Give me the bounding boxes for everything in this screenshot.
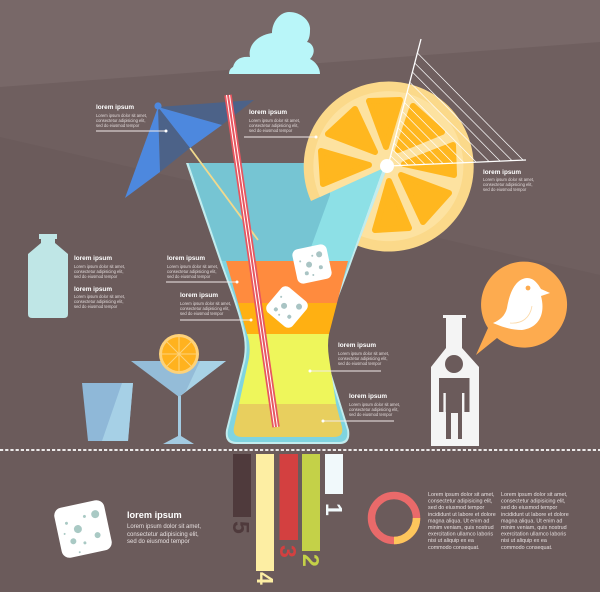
text block: paragraph right: Lorem ipsum dolor sit amet, — [501, 492, 568, 498]
bar 4: 4 — [252, 572, 278, 585]
label: bottle note two: Lorem ipsum dolor sit amet, — [74, 294, 125, 299]
bar 5: 5 — [228, 521, 254, 534]
label: amber layer note: lorem ipsum — [180, 292, 218, 299]
icon: orange slice — [304, 82, 474, 252]
label: orange layer note: lorem ipsum — [167, 255, 205, 262]
text block: paragraph right: exercitation ullamco laboris — [501, 532, 566, 538]
label: orange note: Lorem ipsum dolor sit amet, — [483, 177, 534, 182]
label: orange note — [483, 169, 534, 192]
label: amber layer note: Lorem ipsum dolor sit amet, — [180, 301, 231, 306]
label: orange layer note: sed do eiusmod tempor — [167, 274, 211, 279]
icon: bottle left — [28, 234, 68, 318]
donut chart — [372, 496, 416, 540]
icon: bottle with person — [431, 315, 479, 446]
label: bottle note one: sed do eiusmod tempor — [74, 274, 118, 279]
text block: paragraph left: Lorem ipsum dolor sit amet, — [428, 492, 495, 498]
text block: ice cube note: Lorem ipsum dolor sit amet, — [127, 524, 201, 530]
text block: paragraph right: minim veniam, quis nostrud — [501, 525, 567, 531]
icon: ice cube lower — [264, 284, 310, 330]
label: straw note: lorem ipsum — [249, 109, 287, 116]
text block: paragraph left: incididunt ut labore et dolore — [428, 512, 496, 518]
label: bottle note one: Lorem ipsum dolor sit amet, — [74, 264, 125, 269]
label: tan layer note: consectetur adipisicing elit, — [349, 407, 398, 412]
label: amber layer note: sed do eiusmod tempor — [180, 311, 224, 316]
label: tan layer note: Lorem ipsum dolor sit amet, — [349, 402, 400, 407]
icon: drinking straw — [226, 95, 278, 427]
text block: paragraph left: sed do eiusmod tempor — [428, 505, 485, 511]
text block: paragraph right: nisi ut aliquip ex ea — [501, 538, 547, 544]
drink layer: amber — [238, 303, 337, 334]
label: bottle note two — [74, 286, 125, 309]
text block: paragraph right: incididunt ut labore et dolore — [501, 512, 569, 518]
label: orange note: sed do eiusmod tempor — [483, 187, 527, 192]
text block: paragraph left: nisi ut aliquip ex ea — [428, 538, 474, 544]
icon: cloud — [229, 12, 320, 74]
label: bottle note one — [74, 255, 125, 279]
text block: ice cube note — [127, 510, 201, 545]
text block: paragraph left: consectetur adipisicing elit, — [428, 499, 493, 505]
label: umbrella note: Lorem ipsum dolor sit amet, — [96, 113, 147, 118]
label: tan layer note: lorem ipsum — [349, 393, 387, 400]
icon: tumbler glass — [82, 383, 133, 441]
label: bottle note two: lorem ipsum — [74, 286, 112, 293]
text block: paragraph left: minim veniam, quis nostrud — [428, 525, 494, 531]
label: tan layer note: sed do eiusmod tempor — [349, 412, 393, 417]
drink layer: tan — [234, 404, 342, 437]
label: yellow layer note: consectetur adipisicing elit, — [338, 356, 387, 361]
dashed divider — [0, 449, 600, 451]
text block: ice cube note: sed do eiusmod tempor — [127, 539, 190, 545]
icon: martini glass with orange — [131, 334, 226, 444]
drink layer: yellow — [239, 334, 336, 404]
icon: speech bubble with bird — [476, 262, 567, 355]
text block: paragraph right: magna aliqua. Ut enim ad — [501, 518, 562, 524]
label: orange layer note — [166, 255, 238, 284]
label: umbrella note: sed do eiusmod tempor — [96, 123, 140, 128]
label: yellow layer note — [308, 342, 389, 372]
text block: paragraph left: commodo consequat. — [428, 545, 480, 551]
label: orange note: lorem ipsum — [483, 169, 521, 176]
icon: cocktail umbrella — [125, 100, 258, 240]
label: straw note — [244, 109, 318, 138]
bar 2: 2 — [298, 554, 324, 567]
bar 3: 3 — [275, 545, 301, 558]
glass with layered drink — [186, 163, 388, 444]
label: orange layer note: consectetur adipisicing elit, — [167, 269, 216, 274]
text block: paragraph right: commodo consequat. — [501, 545, 553, 551]
drink layer: orange — [226, 261, 348, 303]
text block: paragraph right: consectetur adipisicing elit, — [501, 499, 566, 505]
text block: paragraph left — [428, 492, 496, 551]
bar 1: 1 — [321, 503, 347, 516]
label: straw note: sed do eiusmod tempor — [249, 128, 293, 133]
label: umbrella note — [96, 104, 168, 132]
label: umbrella note: lorem ipsum — [96, 104, 134, 111]
icon: ice cube upper — [291, 243, 333, 285]
label: bottle note two: consectetur adipisicing elit, — [74, 299, 123, 304]
label: amber layer note: consectetur adipisicing elit, — [180, 306, 229, 311]
text block: ice cube note: lorem ipsum — [127, 510, 182, 520]
icon: large ice cube — [53, 499, 113, 559]
text block: ice cube note: consectetur adipisicing elit, — [127, 532, 199, 538]
label: bottle note one: consectetur adipisicing elit, — [74, 269, 123, 274]
label: tan layer note — [322, 393, 400, 422]
label: straw note: Lorem ipsum dolor sit amet, — [249, 118, 300, 123]
label: bottle note one: lorem ipsum — [74, 255, 112, 262]
label: bottle note two: sed do eiusmod tempor — [74, 304, 118, 309]
hatched triangle diagram — [380, 39, 526, 173]
label: yellow layer note: Lorem ipsum dolor sit amet, — [338, 351, 389, 356]
label: straw note: consectetur adipisicing elit, — [249, 123, 298, 128]
text block: paragraph left: magna aliqua. Ut enim ad — [428, 518, 489, 524]
label: umbrella note: consectetur adipisicing elit, — [96, 118, 145, 123]
text block: paragraph left: exercitation ullamco laboris — [428, 532, 493, 538]
text block: paragraph right: sed do eiusmod tempor — [501, 505, 558, 511]
text block: paragraph right — [501, 492, 569, 551]
label: orange layer note: Lorem ipsum dolor sit amet, — [167, 264, 218, 269]
bar chart — [228, 454, 347, 585]
label: amber layer note — [180, 292, 252, 322]
label: yellow layer note: sed do eiusmod tempor — [338, 361, 382, 366]
label: orange note: consectetur adipisicing elit, — [483, 182, 532, 187]
label: yellow layer note: lorem ipsum — [338, 342, 376, 349]
